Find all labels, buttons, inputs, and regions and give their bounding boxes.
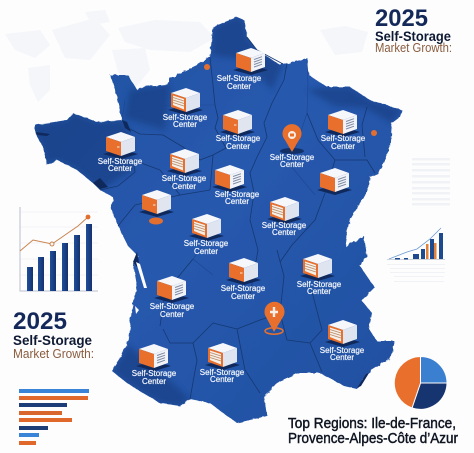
bar and line chart: left [20, 207, 98, 291]
pin: Auvergne [265, 302, 284, 334]
storage center: Limousin [221, 258, 266, 301]
storage center: Provence: Self-Storage [320, 346, 365, 355]
storage box: Alsace south [317, 168, 352, 195]
storage center: Poitou: Self-Storage [184, 239, 229, 248]
caption: top regions: Top Regions: Ile-de-France, [288, 416, 456, 432]
storage center: Poitou [184, 214, 229, 256]
horizontal bar chart [19, 389, 89, 445]
storage center: Paris west: Self-Storage [216, 134, 261, 143]
storage center: Occitanie [200, 343, 245, 384]
faint world map [5, 10, 368, 102]
storage center: Lorraine: Center [331, 142, 355, 151]
map of France [35, 17, 402, 423]
pin with storage label: Champagne: Center [280, 160, 304, 169]
storage center: Aquitaine: Center [160, 310, 184, 319]
pin with storage label: Champagne: Self-Storage [270, 153, 315, 162]
storage center: Midi west: Center [142, 377, 166, 386]
storage center: Rhone-Alpes: Center [307, 287, 331, 296]
storage center: Rhone-Alpes [297, 254, 342, 296]
storage center: Provence [320, 320, 365, 362]
storage center: Brittany [98, 132, 143, 173]
storage center: Midi west [132, 344, 177, 386]
storage center: north [217, 48, 268, 91]
storage center: Burgundy: Self-Storage [262, 221, 307, 230]
pie chart [394, 356, 447, 409]
region borders [122, 120, 213, 160]
storage center: Rhone-Alpes: Self-Storage [297, 280, 342, 289]
storage center: Aquitaine [150, 276, 195, 319]
storage center: Paris west [216, 110, 261, 151]
storage center: Pays de la Loire: Center [172, 182, 196, 191]
storage center: Brittany: Self-Storage [98, 157, 143, 166]
storage center: Poitou: Center [194, 247, 218, 256]
storage center: Pays de la Loire: Self-Storage [162, 174, 207, 183]
heading: top right: Market Growth: [375, 41, 452, 55]
storage center: Lorraine: Self-Storage [321, 134, 366, 143]
darker northern and southern edge shading [35, 17, 402, 406]
white inlet on the Gironde coast [72, 183, 147, 314]
storage center: Pays de la Loire [162, 149, 207, 191]
storage box: Loire [139, 190, 174, 217]
heading: bottom left: 2025 [13, 308, 67, 335]
storage center: north: Self-Storage [217, 74, 262, 83]
storage center: Limousin: Center [231, 292, 255, 301]
storage center: Paris west: Center [226, 142, 250, 151]
storage center: Normandy: Center [173, 120, 197, 129]
storage center: Occitanie: Self-Storage [200, 368, 245, 377]
storage center: Limousin: Self-Storage [221, 284, 266, 293]
storage center: Brittany: Center [108, 164, 132, 173]
marker: dot north [204, 64, 210, 70]
storage center: Centre [212, 165, 260, 206]
heading: bottom left [13, 308, 94, 361]
pin with storage label: Champagne [270, 124, 315, 169]
storage center: Centre: Self-Storage [215, 190, 260, 199]
heading: bottom left: Market Growth: [13, 347, 94, 361]
heading: top right: 2025 [375, 5, 428, 32]
storage center: Midi west: Self-Storage [132, 369, 177, 378]
storage center: Burgundy [262, 197, 307, 237]
storage center: Centre: Center [225, 197, 249, 206]
heading: bottom left: Self-Storage [13, 333, 92, 348]
marker: oval west [149, 218, 163, 224]
storage center: Lorraine [321, 110, 366, 151]
dark coastline accents [36, 120, 369, 388]
storage center: north: Center [227, 82, 251, 91]
small bar chart: right [387, 228, 445, 282]
caption: top regions [288, 416, 458, 447]
storage center: Normandy: Self-Storage [163, 113, 208, 122]
heading: top right: Self-Storage [375, 29, 451, 44]
storage center: Occitanie: Center [210, 375, 234, 384]
marker: dot east [371, 130, 377, 136]
faint report text lines [412, 158, 450, 206]
storage center: Aquitaine: Self-Storage [150, 302, 195, 311]
heading: top right [375, 5, 452, 55]
storage center: Provence: Center [330, 353, 354, 362]
storage center: Burgundy: Center [272, 228, 296, 237]
caption: top regions: Provence-Alpes-Côte d’Azur [288, 431, 458, 447]
storage center: Normandy [163, 88, 208, 129]
